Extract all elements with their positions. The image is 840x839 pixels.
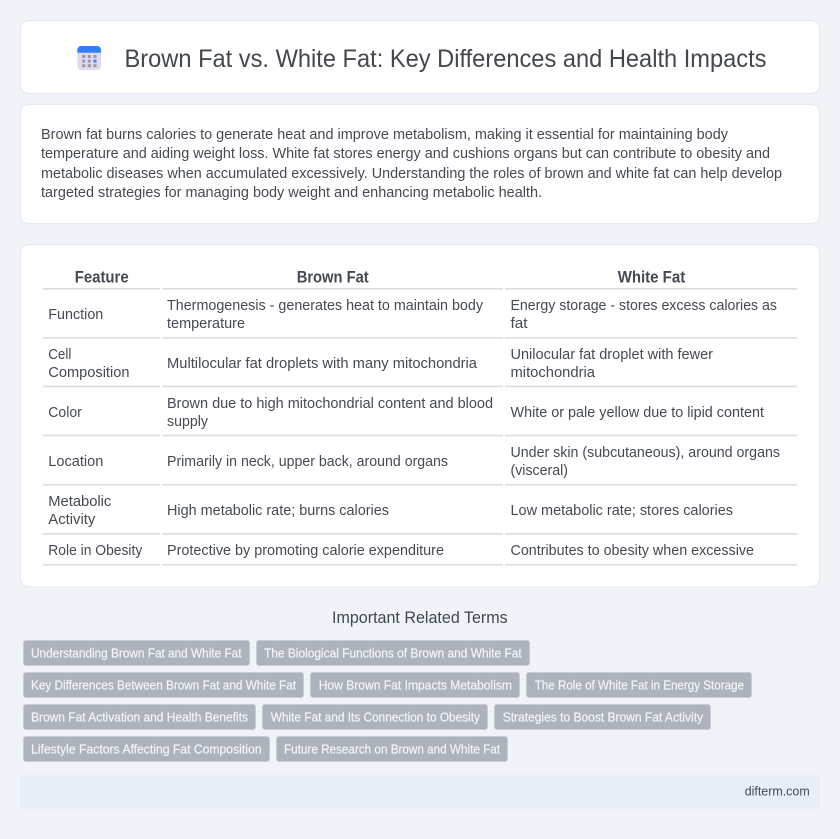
table header row (75, 269, 686, 287)
table row: role in obesity (48, 543, 754, 559)
tag (24, 672, 304, 698)
tag: Strategies to Boost Brown Fat Activity (503, 710, 704, 724)
table row: color: White or pale yellow due to lipid content (510, 405, 764, 421)
table header row: Brown Fat (297, 269, 369, 287)
table row: cell composition (48, 347, 713, 381)
footer bar (20, 775, 820, 809)
table row: location (48, 445, 780, 479)
panel: introduction (20, 104, 820, 224)
table row: location: Primarily in neck, upper back, around organs (167, 454, 448, 470)
tag (310, 672, 520, 698)
table row: cell composition: mitochondria (510, 365, 596, 381)
tag: Understanding Brown Fat and White Fat (31, 646, 242, 660)
table header row: Feature (75, 269, 129, 287)
panel: comparison table (20, 244, 820, 587)
tag: White Fat and Its Connection to Obesity (271, 710, 481, 724)
table row: location: (visceral) (510, 463, 568, 479)
title: Brown Fat vs. White Fat: Key Differences and Health Impacts (124, 46, 766, 73)
table row: color: Color (48, 405, 82, 421)
table row: metabolic activity: Metabolic (48, 494, 112, 510)
table row: cell composition: Composition (48, 365, 129, 381)
tag (262, 704, 488, 730)
tag: How Brown Fat Impacts Metabolism (319, 678, 512, 692)
panel: title header (20, 20, 820, 94)
table row: metabolic activity: Activity (48, 512, 96, 528)
table row: color: supply (167, 414, 209, 430)
heading: important related terms: Important Related Terms (332, 609, 508, 627)
table row: function (48, 298, 777, 332)
text block: introduction paragraph: Brown fat burns calories to generate heat and improve metabolism, making it essential for maintaining body (41, 127, 729, 143)
table row: role in obesity: Role in Obesity (48, 543, 143, 559)
text block: introduction paragraph: temperature and aiding weight loss. White fat stores energy and cushions organs but can contribute to obesity and (41, 146, 770, 162)
table row: cell composition: Multilocular fat droplets with many mitochondria (167, 356, 478, 372)
tag (276, 736, 508, 762)
table row: location: Location (48, 454, 103, 470)
table row: function: Thermogenesis - generates heat to maintain body (167, 298, 484, 314)
table row: function: Energy storage - stores excess calories as (510, 298, 777, 314)
icon: calendar (77, 46, 101, 70)
table row: metabolic activity (48, 494, 733, 528)
table row: function: temperature (167, 316, 245, 332)
tag (24, 704, 256, 730)
table row: function: Function (48, 307, 103, 323)
tag: Key Differences Between Brown Fat and White Fat (31, 678, 296, 692)
tag (24, 736, 270, 762)
table row: color: Brown due to high mitochondrial content and blood (167, 396, 493, 412)
tag (24, 640, 250, 666)
tag: Future Research on Brown and White Fat (284, 742, 500, 756)
tag: The Biological Functions of Brown and White Fat (264, 646, 522, 660)
tag: Lifestyle Factors Affecting Fat Composition (31, 742, 262, 756)
footer text: difterm.com (745, 784, 810, 799)
text block: introduction paragraph: metabolic diseases when accumulated excessively. Understanding the roles of brown and white fat can help develop (41, 166, 782, 182)
text block: introduction paragraph (41, 127, 782, 201)
table row: role in obesity: Contributes to obesity when excessive (510, 543, 754, 559)
tag: The Role of White Fat in Energy Storage (535, 678, 744, 692)
table row: metabolic activity: Low metabolic rate; stores calories (510, 503, 733, 519)
table row: role in obesity: Protective by promoting calorie expenditure (167, 543, 444, 559)
tag (526, 672, 752, 698)
tag (256, 640, 530, 666)
panel: related term tags (24, 640, 752, 762)
text block: introduction paragraph: targeted strategies for managing body weight and enhancing metabolic health. (41, 185, 542, 201)
table row: location: Under skin (subcutaneous), around organs (510, 445, 780, 461)
tag (494, 704, 710, 730)
table row: cell composition: Cell (48, 347, 71, 363)
table row: metabolic activity: High metabolic rate; burns calories (167, 503, 389, 519)
table row: function: fat (510, 316, 528, 332)
table header row: White Fat (618, 269, 686, 287)
tag: Brown Fat Activation and Health Benefits (31, 710, 248, 724)
table row: cell composition: Unilocular fat droplet with fewer (510, 347, 713, 363)
table row: color (48, 396, 764, 430)
